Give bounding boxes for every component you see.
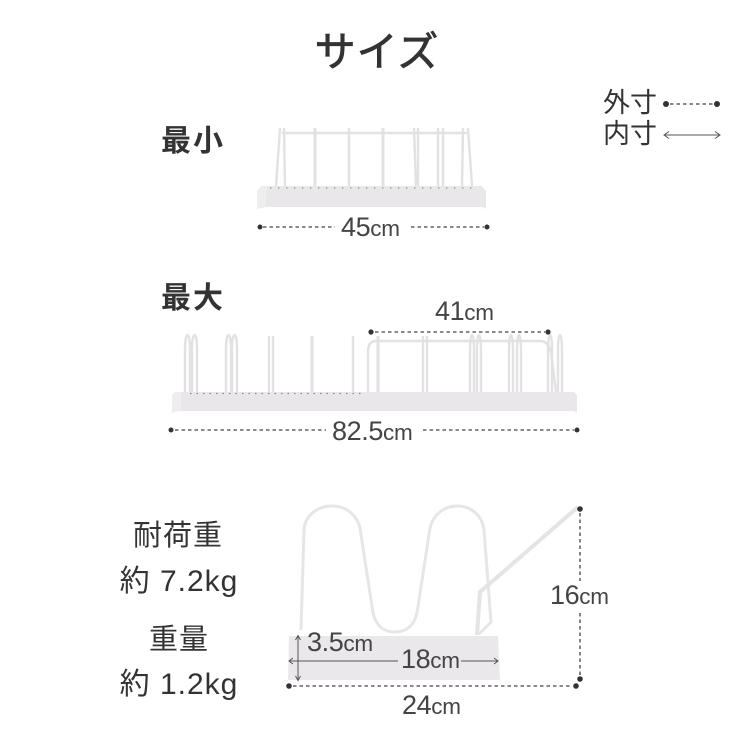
dimension: 41cm: 41cm bbox=[435, 296, 494, 326]
spec: weight: 重量 bbox=[149, 623, 209, 656]
spec: load capacity: 約 7.2kg bbox=[120, 565, 238, 598]
dimension: 24cm bbox=[286, 683, 579, 720]
spec: weight: 約 1.2kg bbox=[120, 668, 238, 701]
label: minimum: 最小 bbox=[161, 125, 225, 158]
spec: weight bbox=[120, 623, 238, 701]
dimension: 82.5cm bbox=[168, 416, 580, 446]
rack side view bbox=[288, 506, 578, 680]
wire loop bbox=[301, 506, 491, 634]
spec: load capacity: 耐荷重 bbox=[133, 519, 223, 552]
legend: inner dimension: 内寸 bbox=[603, 119, 657, 149]
legend: outer and inner dimensions bbox=[603, 88, 720, 149]
dimension: 45cm bbox=[258, 212, 490, 242]
dimension: 18cm: 18cm bbox=[401, 644, 460, 674]
spec: load capacity bbox=[120, 519, 238, 598]
title: サイズ bbox=[315, 29, 439, 75]
dimension: 82.5cm: 82.5cm bbox=[332, 416, 413, 446]
dimension: 16cm: 16cm bbox=[550, 580, 609, 610]
dimension: 18cm bbox=[289, 644, 498, 674]
label: maximum: 最大 bbox=[161, 282, 225, 315]
dimension: 45cm: 45cm bbox=[341, 212, 400, 242]
rack: minimum size bbox=[257, 128, 486, 209]
dimension: 16cm bbox=[550, 506, 609, 682]
dimension: 3.5cm: 3.5cm bbox=[307, 627, 373, 657]
dimension: 41cm bbox=[368, 296, 551, 335]
wire arm bbox=[477, 507, 578, 635]
dimension: 24cm: 24cm bbox=[402, 690, 461, 720]
base bbox=[288, 636, 500, 680]
dimension: 3.5cm bbox=[296, 627, 373, 680]
legend: outer dimension: 外寸 bbox=[603, 88, 657, 118]
rack: maximum size bbox=[172, 335, 577, 413]
